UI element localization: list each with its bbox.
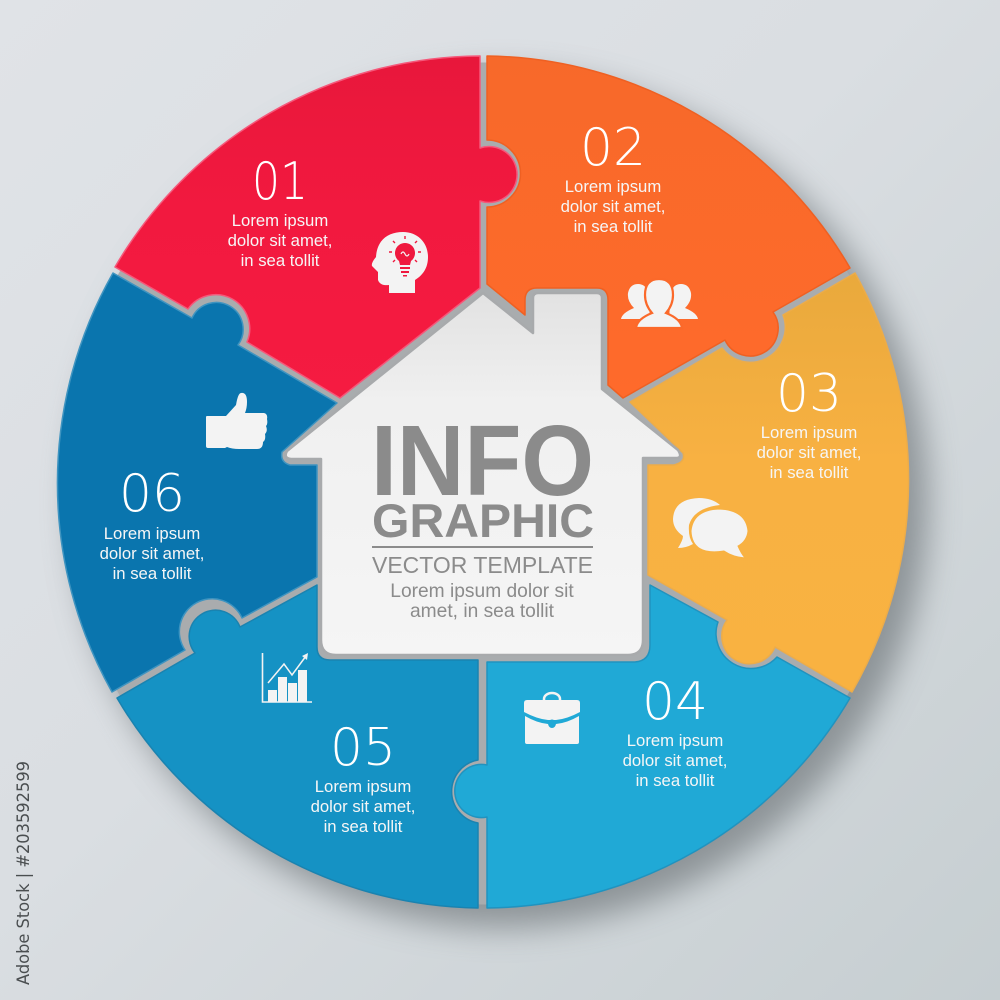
number 01: 01 <box>252 152 308 212</box>
gap base disc <box>62 62 904 904</box>
text 06: in sea tollit <box>113 564 192 583</box>
panel 6: dark blue segment <box>57 273 337 692</box>
text 06: Lorem ipsum <box>104 524 200 543</box>
text 05: dolor sit amet, <box>311 797 415 816</box>
text 03: Lorem ipsum <box>761 423 857 442</box>
text 05: Lorem ipsum <box>315 777 411 796</box>
panel 2: orange segment <box>487 56 850 398</box>
text 04: dolor sit amet, <box>623 751 727 770</box>
number 06: 06 <box>119 464 185 524</box>
icon: growth bar chart <box>262 653 312 702</box>
text 02: Lorem ipsum <box>565 177 661 196</box>
text 02: in sea tollit <box>574 217 653 236</box>
panel 4: light blue segment <box>455 585 850 908</box>
text 01: dolor sit amet, <box>228 231 332 250</box>
number 04: 04 <box>642 672 708 732</box>
icon: group of people <box>621 279 698 328</box>
text 06: dolor sit amet, <box>100 544 204 563</box>
icon: head with light bulb <box>372 232 428 293</box>
title: INFO: INFO <box>371 405 594 517</box>
title rule <box>372 546 593 548</box>
title: GRAPHIC: GRAPHIC <box>372 494 594 547</box>
icon: briefcase <box>524 693 580 744</box>
panel 1: red segment <box>115 56 517 398</box>
circle drop shadow <box>74 74 928 928</box>
number 02: 02 <box>580 118 646 178</box>
text 04: Lorem ipsum <box>627 731 723 750</box>
text 01: Lorem ipsum <box>232 211 328 230</box>
icon: thumbs up <box>206 393 267 449</box>
panel 5: mid blue segment <box>117 585 478 908</box>
number 03: 03 <box>776 364 842 424</box>
text 03: dolor sit amet, <box>757 443 861 462</box>
panel 3: yellow segment <box>630 273 909 692</box>
text 02: dolor sit amet, <box>561 197 665 216</box>
image id label: Adobe Stock | #203592599 <box>14 761 34 985</box>
text 05: in sea tollit <box>324 817 403 836</box>
icon: speech bubbles <box>673 498 748 558</box>
centre description: amet, in sea tollit <box>410 601 555 622</box>
title: VECTOR TEMPLATE: VECTOR TEMPLATE <box>372 552 593 578</box>
text 01: in sea tollit <box>241 251 320 270</box>
text 04: in sea tollit <box>636 771 715 790</box>
number 05: 05 <box>330 718 396 778</box>
house centre panel <box>286 293 680 655</box>
text 03: in sea tollit <box>770 463 849 482</box>
centre description: Lorem ipsum dolor sit <box>390 581 574 602</box>
